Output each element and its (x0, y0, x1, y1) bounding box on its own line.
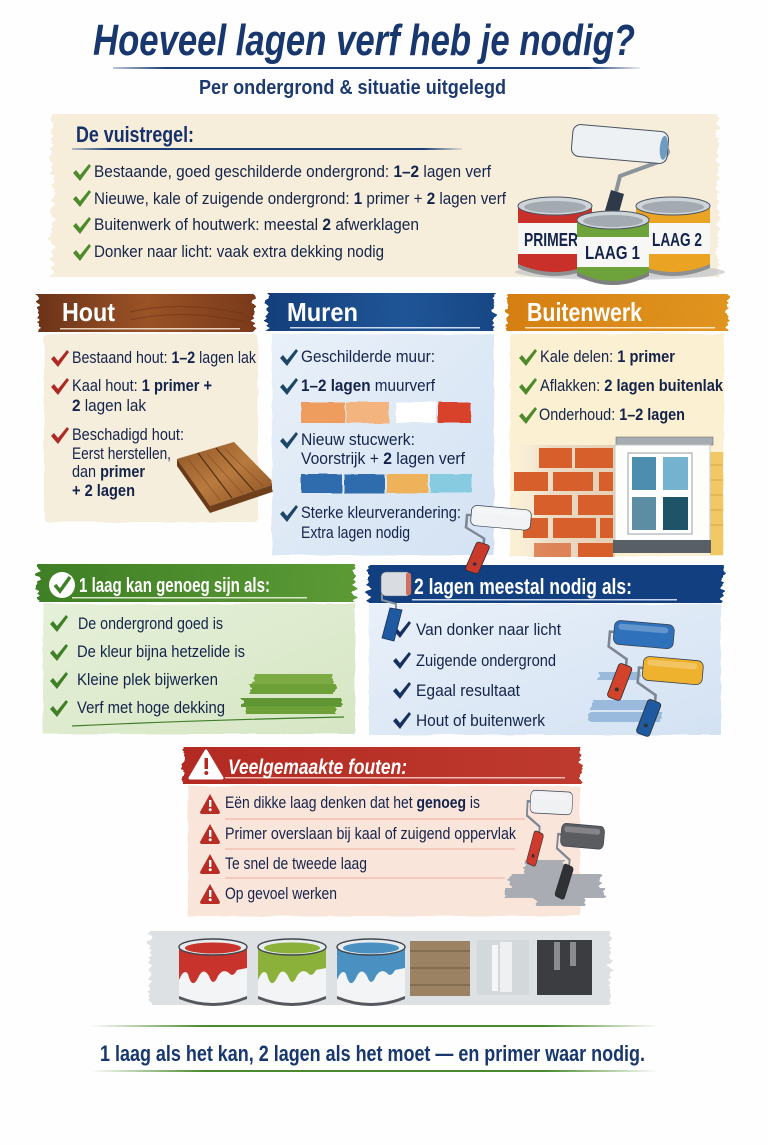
header: Buitenwerk (527, 297, 642, 327)
1 laag list: De kleur bijna hetzelide is (77, 642, 245, 661)
muren list: Nieuw stucwerk: (301, 430, 415, 449)
panel background (510, 334, 724, 556)
muren list (280, 347, 465, 542)
rule list: Nieuwe, kale of zuigende ondergrond: 1 primer + 2 lagen verf (94, 189, 506, 208)
panel: de vuistregel (52, 114, 725, 285)
fouten list: Op gevoel werken (225, 884, 337, 903)
fouten list: Eën dikke laag denken dat het genoeg is (225, 793, 480, 812)
band background (150, 931, 610, 1005)
panel: muren (267, 293, 494, 555)
rule list: Buitenwerk of houtwerk: meestal 2 afwerklagen (94, 215, 419, 234)
swatches: cool (301, 474, 472, 493)
title underline (113, 67, 640, 69)
footer bottom line (90, 1070, 658, 1072)
green underline (72, 717, 344, 726)
icon: yellow roller (633, 656, 704, 741)
fouten list (200, 793, 516, 904)
buitenwerk list: Kale delen: 1 primer (540, 347, 675, 366)
header (183, 747, 581, 784)
sample: dark paint (537, 940, 592, 995)
panel background (188, 786, 580, 916)
paint smears: blue (590, 672, 660, 722)
muren list: Extra lagen nodig (301, 523, 410, 542)
paint swatch: green (242, 674, 342, 714)
sample: white paint (477, 940, 529, 995)
footer message: 1 laag als het kan, 2 lagen als het moet — en primer waar nodig. (100, 1041, 645, 1066)
panel: hout (38, 294, 280, 522)
1 laag list (50, 614, 245, 717)
can: primer (518, 197, 592, 276)
1 laag list: Kleine plek bijwerken (77, 670, 218, 689)
icon: dark roller (552, 823, 605, 903)
footer top line (90, 1025, 658, 1027)
can: green (258, 939, 326, 1006)
icon: paint roller (571, 124, 669, 216)
rule list: Bestaande, goed geschilderde ondergrond: 1–2 lagen verf (94, 162, 491, 181)
icon: blue roller (604, 620, 675, 705)
header: 2 lagen meestal nodig als: (414, 574, 632, 599)
2 lagen list: Hout of buitenwerk (416, 711, 545, 730)
panel background (272, 334, 494, 555)
swatches: warm (301, 402, 471, 423)
panel: 2 lagen (368, 565, 723, 741)
buitenwerk list: Onderhoud: 1–2 lagen (539, 405, 685, 424)
hout list (51, 348, 256, 500)
2 lagen list: Van donker naar licht (416, 620, 561, 639)
header (38, 294, 254, 332)
can: laag 1: LAAG 1 (585, 243, 640, 263)
can: laag 1 (577, 211, 649, 285)
header (368, 565, 723, 603)
hout list: Beschadigd hout: (72, 425, 184, 444)
icon: warning header (190, 751, 222, 778)
can: primer: PRIMER (524, 230, 578, 250)
hout list: dan primer (72, 462, 145, 481)
rule list (73, 162, 506, 261)
hout list: 2 lagen lak (72, 396, 146, 415)
1 laag list: Verf met hoge dekking (77, 698, 225, 717)
buitenwerk list (519, 347, 723, 424)
hout list: Bestaand hout: 1–2 lagen lak (72, 348, 256, 367)
panel background (52, 114, 718, 277)
band: paint cans and samples (150, 931, 610, 1006)
hout list: + 2 lagen (72, 481, 135, 500)
can: laag 2 (636, 197, 710, 276)
heading: De vuistregel: (76, 122, 194, 147)
icon: paint roller on muren panel (462, 505, 532, 578)
2 lagen list: Zuigende ondergrond (416, 651, 556, 670)
panel: 1 laag (38, 564, 355, 734)
hout list: Eerst herstellen, (72, 444, 171, 463)
2 lagen list (393, 620, 561, 730)
header: 1 laag kan genoeg sijn als: (79, 575, 270, 597)
fouten list: Primer overslaan bij kaal of zuigend oppervlak (225, 824, 516, 843)
header (267, 293, 494, 331)
header (38, 564, 354, 602)
hout list: Kaal hout: 1 primer + (72, 376, 212, 395)
fouten list: Te snel de tweede laag (225, 854, 367, 873)
illustration: brick wall (512, 445, 615, 557)
paint smear: grey (505, 860, 605, 906)
rule list: Donker naar licht: vaak extra dekking nodig (94, 242, 384, 261)
title: Hoeveel lagen verf heb je nodig? (93, 16, 635, 65)
header: Hout (62, 297, 115, 327)
icon: white roller (524, 790, 573, 869)
icon: wood planks (177, 442, 280, 513)
1 laag list: De ondergrond goed is (78, 614, 223, 633)
icon: paint cans (515, 197, 725, 285)
panel background (44, 334, 258, 522)
panel: buitenwerk (507, 294, 727, 557)
2 lagen list: Egaal resultaat (416, 681, 520, 700)
row dividers (225, 819, 525, 878)
panel background (369, 604, 721, 735)
header (507, 294, 727, 331)
can: laag 2: LAAG 2 (652, 230, 702, 250)
buitenwerk list: Aflakken: 2 lagen buitenlak (540, 376, 723, 395)
heading underline (72, 148, 462, 150)
header: Veelgemaakte fouten: (228, 756, 407, 779)
can: blue (337, 939, 405, 1006)
muren list: Sterke kleurverandering: (301, 503, 461, 522)
muren list: Voorstrijk + 2 lagen verf (301, 449, 465, 468)
subtitle: Per ondergrond & situatie uitgelegd (199, 77, 506, 99)
muren list: 1–2 lagen muurverf (301, 376, 435, 395)
sample: wood (410, 941, 470, 996)
illustration: window (613, 437, 713, 553)
panel background (43, 604, 355, 734)
panel: veelgemaakte fouten (183, 747, 605, 916)
muren list: Geschilderde muur: (301, 347, 435, 366)
illustration: siding (710, 452, 723, 555)
icon: check circle (49, 572, 75, 598)
can: red (179, 939, 247, 1006)
icon: roller on header (381, 572, 411, 641)
header: Muren (287, 297, 358, 327)
